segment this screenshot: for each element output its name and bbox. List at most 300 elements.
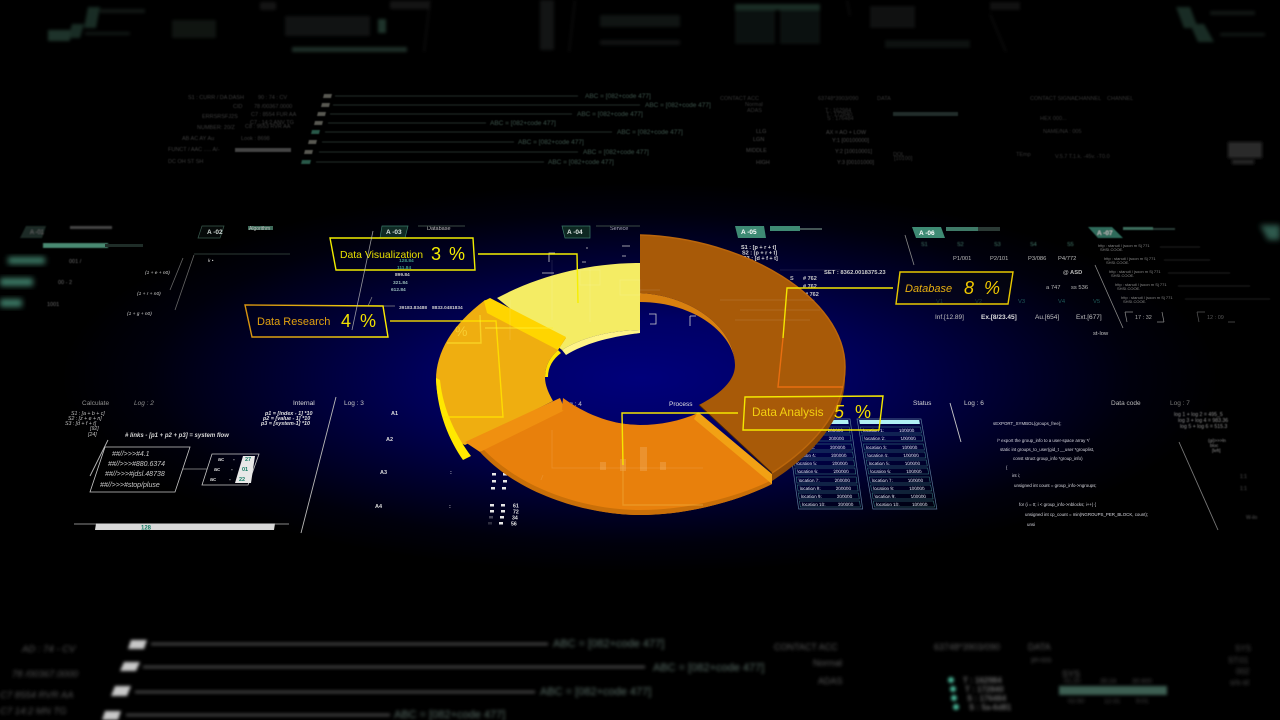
tab A-04: A -04	[567, 229, 583, 236]
highlighted SYS row: 35:24	[1100, 678, 1117, 685]
upper right center details: SET : 8362.0018375.23	[824, 270, 886, 276]
tab A-07	[1088, 227, 1175, 238]
tab A-03: A -03	[386, 229, 402, 236]
center mid-row numbers	[368, 258, 463, 311]
panel: code log 6: Data code	[1111, 400, 1141, 407]
callout: data visualization	[330, 238, 475, 270]
table left: location 7:	[798, 478, 820, 483]
link box	[90, 447, 190, 492]
table right: location 1:	[863, 428, 884, 433]
right database panel details: http : stanuti / jsoon m Sj 771	[1109, 269, 1161, 274]
panel: code log 6: /* export the group_info to a user-space array */	[997, 438, 1090, 443]
upper left labels: S1 : CURR / DA DASH	[188, 95, 244, 101]
data rows: upper ABC code lines: ABC = [082+code 477]	[577, 111, 643, 118]
highlighted SYS row: 01:20	[1064, 678, 1081, 685]
upper left labels: ERRSRSFJ2S	[202, 114, 238, 120]
upper right labels: LGN	[753, 137, 764, 143]
right database panel details: 12 : 09	[1207, 315, 1224, 321]
callout: data visualization: 3	[431, 244, 441, 264]
table left: location 3:	[794, 445, 815, 450]
callout: data analysis: %	[855, 402, 871, 422]
left blurred teal bars: (1 + e + n0)	[145, 270, 170, 276]
left blurred teal bars: 00 - 2	[58, 280, 72, 286]
panel: code log 6: (gi)>>>ln	[1208, 438, 1226, 443]
right database panel details: SHSI.COOE.	[1106, 260, 1129, 265]
callout: data research: %	[360, 311, 376, 331]
ac value box: ac	[218, 457, 224, 463]
bottom code lines	[102, 638, 764, 720]
upper right labels: HIGH	[756, 160, 770, 166]
upper right center details: # 762	[805, 292, 819, 298]
table left: 200000	[830, 445, 846, 450]
panel: log 3: Log : 3	[344, 400, 364, 407]
connector: database	[778, 288, 893, 387]
progress bar 128: 128	[141, 526, 152, 532]
bottom right labels: ADAS	[818, 676, 843, 686]
far right labels	[1228, 644, 1251, 687]
center mid-row numbers: 8833.0481834	[432, 305, 463, 311]
right database panel details: SHSI.COOE.	[1123, 299, 1146, 304]
right database panel details: SHSI.COOE.	[1100, 247, 1123, 252]
callout: data research: 4	[341, 311, 351, 331]
panel: code log 6: const struct group_info *group_info)	[1013, 456, 1083, 461]
upper left labels: Look : 8698	[241, 136, 270, 142]
data rows: upper ABC code lines: ABC = [082+code 477]	[585, 93, 651, 100]
bottom code lines: ABC = [082+code 477]	[553, 638, 664, 650]
table left: 200000	[828, 436, 845, 441]
panel: code log 6: log 5 + log 6 = 515.3	[1180, 424, 1227, 430]
upper right labels: DOL	[893, 152, 904, 158]
connector: data visualization	[478, 254, 578, 303]
tab A-02: Algorithm	[249, 226, 270, 232]
highlighted SYS row	[1059, 678, 1167, 705]
panel: log 3: Process	[669, 401, 693, 408]
callout: data visualization: %	[449, 244, 465, 264]
upper right labels: Normal	[745, 102, 763, 108]
right database panel details: V3	[1018, 299, 1025, 305]
link box: ##//>>>#stop/pluse	[100, 482, 160, 489]
panel: calculate log 2: Calculate	[82, 400, 109, 407]
right database panel details: Ext.[677]	[1076, 314, 1102, 321]
tab A-01: A -01	[30, 230, 45, 236]
data rows: upper ABC code lines: ABC = [082+code 477]	[518, 139, 584, 146]
upper right labels: LLG	[756, 129, 766, 135]
upper left labels: AB AC AY Au	[182, 136, 214, 142]
panel: code log 6: int i;	[1012, 473, 1020, 478]
teal status dots: S : 5a-6d81	[969, 703, 1012, 712]
ac value box: ac	[214, 467, 220, 473]
left blurred teal bars: (1 + r + n0)	[137, 291, 161, 297]
data rows: upper ABC code lines: ABC = [082+code 477]	[645, 102, 711, 109]
bottom right labels: CONTACT ACC	[774, 642, 838, 652]
table right: location 7:	[871, 478, 893, 483]
panel: code log 6: unsigned int count = group_info->ngroups;	[1014, 483, 1097, 488]
right database panel details: http : stanuti / jsoon m Sj 771	[1121, 295, 1173, 300]
tab A-03	[380, 226, 465, 238]
ac value box: 01	[242, 467, 248, 473]
right database panel details: @ ASD	[1063, 270, 1082, 276]
callout: database	[896, 272, 1013, 304]
table right: location 6:	[870, 469, 892, 474]
right database panel details: S2	[957, 242, 964, 248]
segment: data research amber	[436, 298, 566, 460]
ac value box	[202, 454, 259, 485]
right database panel details: http : stanuti / jsoon m Sj 771	[1115, 282, 1167, 287]
panel: code log 6	[950, 400, 1258, 530]
tab A-05	[735, 226, 822, 238]
left blurred teal bars: k •	[208, 258, 214, 264]
data rows: upper ABC code lines: ABC = [082+code 477]	[490, 120, 556, 127]
tables: location values	[786, 400, 937, 509]
tab A-07: A -07	[1097, 230, 1113, 237]
upper right labels: CONTACT SIGNAL	[1030, 96, 1078, 102]
upper right labels: 63748*3903/090	[818, 96, 858, 102]
panel: calculate log 2: S1 : [a + b + c]	[71, 411, 105, 417]
right database panel details: S3	[994, 242, 1001, 248]
upper right center details: S3 : [d + f + t]	[743, 256, 778, 262]
panel: code log 6: W-ilo	[1246, 515, 1258, 521]
upper right labels	[720, 96, 1133, 166]
far right keypad	[1228, 142, 1262, 164]
table left: location 5:	[796, 461, 818, 466]
right database panel details	[905, 225, 1280, 337]
table right: 100000	[903, 453, 920, 458]
left blurred teal bars: 1001	[47, 302, 59, 308]
left blurred teal bars: (1 + g + n0)	[127, 311, 152, 317]
bottom right labels	[774, 642, 1080, 686]
data rows: upper ABC code lines: ABC = [082+code 477]	[583, 149, 649, 156]
table right: 100000	[910, 494, 927, 499]
table right: 100000	[904, 461, 921, 466]
callout: data analysis: Data Analysis	[752, 405, 824, 419]
tab A-04: Service	[610, 226, 628, 232]
upper left labels: CID	[233, 104, 242, 110]
panel: code log 6: static int groups_to_user(gid_t __user *grouplist,	[1000, 447, 1094, 452]
upper right labels: HEX 000...	[1040, 116, 1067, 122]
connector lines	[390, 254, 893, 505]
bottom left labels: C7 8554 RVR AA	[0, 690, 73, 701]
table left: location 6:	[797, 469, 819, 474]
upper right center details: S	[790, 276, 794, 282]
panel: calculate log 2: S2 : [z + e + n]	[68, 416, 102, 422]
panel: code log 6: bloc	[1210, 443, 1219, 448]
data rows: upper ABC code lines: ABC = [082+code 477]	[617, 129, 683, 136]
table right: location 3:	[866, 445, 887, 450]
table left: location 9:	[801, 494, 822, 499]
panel: log 3: A4	[375, 504, 383, 510]
upper left labels: C7 : 8554 FUR AA	[251, 112, 297, 118]
right database panel details: P2/101	[990, 256, 1008, 262]
panel: code log 6: unsi	[1027, 522, 1035, 527]
right database panel details: P3/086	[1028, 256, 1046, 262]
right database panel details: S4	[1030, 242, 1037, 248]
center mid-row numbers: 111.84	[397, 265, 411, 271]
bottom code lines: ABC = [082+code 477]	[653, 662, 764, 674]
panel: calculate log 2: p3 = [system-1] *10	[260, 421, 310, 427]
table right: 100000	[902, 445, 918, 450]
table left: location 1:	[791, 428, 813, 433]
right database panel details: http : stanuti / jsoon m Sj 771	[1098, 243, 1150, 248]
data rows: upper ABC code lines	[301, 93, 711, 166]
left blurred teal bars	[0, 243, 290, 317]
table left: 200000	[835, 486, 852, 491]
right database panel details: SHSI.COOE.	[1117, 286, 1140, 291]
table left: location 8:	[799, 486, 821, 491]
bottom right labels: DATA	[1028, 642, 1051, 652]
right database panel details: st-low	[1093, 331, 1109, 337]
progress bar 128	[74, 524, 289, 532]
right database panel details: Au.[654]	[1035, 314, 1059, 321]
panel: log 3: A3	[380, 470, 387, 476]
panel: calculate log 2: [92]	[89, 426, 99, 432]
panel: code log 6: Log : 7	[1170, 400, 1190, 407]
panel: calculate log 2: p2 = [value - 1] *10	[262, 416, 310, 422]
upper right labels: ADAS	[747, 108, 762, 114]
center mid-row numbers: 321.84	[393, 280, 408, 286]
panel: calculate log 2: p1 = [index - 1] *10	[264, 411, 312, 417]
upper right labels: V.5.7 T.1.k. -45v. -T0.0	[1055, 154, 1110, 160]
bracket squares panel	[540, 246, 696, 326]
bottom left labels: C7 14:2 MN TG	[0, 706, 67, 717]
upper right labels: Y:3 [00101000]	[837, 160, 874, 166]
table left: 200000	[831, 453, 847, 458]
right database panel details: Ex.[8/23.45]	[981, 314, 1017, 321]
table left: 200000	[837, 494, 853, 499]
data rows: upper ABC code lines: ABC = [082+code 477]	[548, 159, 614, 166]
tab A-06	[912, 227, 1000, 238]
panel: code log 6: {	[1006, 465, 1008, 470]
bottom left labels: 78 /00367.0000	[12, 669, 79, 680]
upper right labels: NAME/NA : 005	[1043, 129, 1082, 135]
top blurred HUD strip	[48, 0, 1265, 52]
panel: code log 6: Log : 6	[964, 400, 984, 407]
right database panel details: SHSI.COOE.	[1111, 273, 1134, 278]
table right: location 9:	[874, 494, 896, 499]
bottom right labels: yn-ccs	[1031, 657, 1052, 664]
segment: database brown	[640, 235, 845, 481]
right database panel details: V5	[1093, 299, 1100, 305]
ac value box: ac	[210, 477, 216, 483]
right database panel details: http : stanuti / jsoon m Sj 771	[1104, 256, 1156, 261]
upper right labels: Y:2 [10010001]	[835, 149, 872, 155]
far right labels: s/s-st	[1230, 678, 1250, 687]
right database panel details: P4/772	[1058, 256, 1076, 262]
upper right labels: DATA	[877, 96, 891, 102]
table left: 200000	[832, 461, 848, 466]
donut chart	[436, 235, 845, 515]
panel: code log 6: [left]	[1212, 448, 1221, 453]
upper left labels: 78 /00367.0000	[254, 104, 292, 110]
dot list	[488, 473, 519, 528]
table right: 100000	[912, 502, 928, 507]
upper right labels: TEmp	[1016, 152, 1031, 158]
highlighted SYS row: 12:31	[1104, 698, 1121, 705]
upper right center details	[741, 245, 886, 298]
right database panel details: S5	[1067, 242, 1074, 248]
upper right center details: # 762	[803, 276, 817, 282]
upper right center details: S2 : [p + r + t]	[742, 250, 777, 256]
right database panel details: Inf.[12.89]	[935, 314, 964, 321]
center mid-row numbers: 612.84	[391, 287, 406, 293]
upper right labels: [10100]	[894, 156, 913, 162]
highlighted SYS row: 9:01	[1136, 698, 1149, 705]
table left: 200000	[833, 469, 849, 474]
dot list: 34	[512, 516, 518, 522]
bottom right labels: Normal	[813, 658, 842, 668]
tab A-05: A -05	[741, 229, 757, 236]
panel: calculate log 2: [24]	[87, 432, 97, 438]
table left: 200000	[827, 428, 844, 433]
connector: data analysis	[622, 413, 738, 505]
left blurred teal bars: 001 /	[69, 259, 82, 265]
table left: location 10:	[802, 502, 826, 507]
table right: 100000	[907, 478, 924, 483]
bottom row blurred HUD	[0, 638, 1251, 720]
table right: location 8:	[873, 486, 895, 491]
link box: ##//>>>#jdsl.48738	[105, 471, 165, 478]
right database panel details: 17 : 32	[1135, 315, 1152, 321]
connector: data research	[390, 315, 553, 417]
ac value box: 22	[239, 477, 245, 483]
tab A-06: A -06	[919, 230, 935, 237]
upper right labels: T : 162984	[825, 108, 851, 114]
callout: data analysis	[743, 396, 883, 430]
link box: ##//>>>#4.1	[112, 451, 150, 458]
table left: location 4:	[795, 453, 816, 458]
far right labels: SYS	[1235, 644, 1251, 653]
dot list: 61	[513, 504, 519, 510]
right database panel details: a 747	[1046, 285, 1061, 291]
upper right labels: CHANNEL	[1075, 96, 1101, 102]
far right labels: 002	[1236, 667, 1250, 676]
table right: 100000	[900, 436, 917, 441]
table left	[786, 419, 863, 509]
panel: calculate log 2: # links - [p1 + p2 + p3] = system flow	[125, 433, 229, 439]
panel: calculate log 2: S3 : [d + f + t]	[65, 421, 97, 427]
right database panel details: ss 536	[1071, 285, 1088, 291]
upper right labels: T : 172840	[826, 112, 852, 118]
panel: code log 6: log 1 + log 2 = 495_5	[1174, 412, 1223, 418]
tab A-02	[198, 226, 273, 238]
tabs row	[20, 226, 1175, 238]
far right labels: ST:01	[1228, 656, 1249, 665]
right database panel details: P1/001	[953, 256, 971, 262]
right database panel details: V1	[936, 299, 943, 305]
callout: database: Database	[905, 283, 952, 295]
bottom right labels: SYS	[1062, 669, 1080, 679]
panel: log 3: Log : 4	[562, 401, 582, 408]
panel: code log 6: 1:1	[1240, 486, 1247, 492]
callout: database: %	[984, 278, 1000, 298]
highlighted SYS row: 02:50	[1068, 698, 1085, 705]
upper right labels: S : 176484	[827, 116, 854, 122]
panel: calculate log 2: Log : 2	[134, 400, 154, 407]
upper left labels: FUNCT / AAC ..... A/-	[168, 147, 220, 153]
table right	[857, 419, 937, 509]
callout: data research	[245, 305, 388, 337]
callout: data research: Data Research	[257, 316, 330, 328]
upper left labels: C7 : 14:2 ANV TG	[250, 120, 294, 126]
dot list: 72	[513, 510, 519, 516]
table right: 100000	[909, 486, 925, 491]
table right: 100000	[906, 469, 922, 474]
upper left labels: DC OH ST SH	[168, 159, 203, 165]
panel: log 3	[344, 400, 693, 528]
upper right center details: # 762	[803, 284, 817, 290]
teal status dots: T : 172840	[965, 685, 1004, 694]
table right: 100000	[899, 428, 915, 433]
upper right center details: S1 : [p + r + t]	[741, 245, 776, 251]
dot list: 56	[511, 522, 517, 528]
teal status dots: T : 162984	[963, 676, 1002, 685]
right database panel details: S1	[921, 242, 928, 248]
tab A-04	[562, 226, 640, 238]
callout: database: 8	[964, 278, 974, 298]
bottom right labels: 63748*3903/090	[934, 642, 1000, 652]
table left: 200000	[838, 502, 854, 507]
right database panel details: V2	[975, 299, 982, 305]
ac value box: -	[229, 477, 231, 483]
panel: code log 6: sEXPORT_SYMBOL(groups_free);	[993, 421, 1062, 426]
upper right labels: Y:1 [00100000]	[832, 138, 869, 144]
bottom left labels: AD : 74 - CV	[21, 644, 77, 655]
upper right labels: AX = AO + LOW	[826, 130, 867, 136]
panel: log 3: A2	[386, 437, 393, 443]
ac value box: -	[231, 467, 233, 473]
callout: data analysis: 5	[834, 402, 845, 422]
ghost bars	[600, 447, 666, 471]
callout: data visualization: Data Visualization	[340, 250, 423, 261]
panel: calculate log 2: Internal	[293, 400, 315, 407]
ac value box: -	[233, 457, 235, 463]
segment: data visualization pale yellow	[497, 263, 640, 355]
tables: location values: Status	[913, 400, 932, 407]
tab A-03: Database	[427, 226, 451, 232]
table right: location 2:	[864, 436, 886, 441]
bottom code lines: ABC = [082+code 477]	[540, 686, 651, 698]
segment: data analysis orange	[465, 398, 772, 515]
center mid-row numbers: 128.84	[399, 258, 414, 264]
table left: location 2:	[792, 436, 814, 441]
tab A-01	[20, 226, 112, 238]
table right: location 5:	[868, 461, 890, 466]
link box: ##//>>>#880.6374	[108, 461, 165, 468]
panel: code log 6: log 3 + log 4 = 983.36	[1178, 418, 1228, 424]
upper left labels	[168, 95, 297, 165]
upper right labels: MIDDLE	[746, 148, 767, 154]
right database panel details: V4	[1058, 299, 1066, 305]
panel: code log 6: unsigned int cp_count = min(NGROUPS_PER_BLOCK, count);	[1025, 512, 1148, 517]
center mid-row numbers: 39183.83488	[399, 305, 427, 311]
upper right labels: CONTACT ACC	[720, 96, 759, 102]
ac value box: 27	[245, 457, 251, 463]
panel: log 3: :	[449, 504, 451, 510]
teal status dots	[948, 676, 1012, 712]
upper left labels: C8 : 9553 RVR AA	[245, 124, 291, 130]
panel: code log 6: 1:1	[1240, 474, 1247, 480]
table left: 200000	[834, 478, 851, 483]
upper left labels: 90 : 74 : CV	[258, 95, 287, 101]
ghost percentage: %	[455, 323, 467, 339]
upper left labels: NUMBER: 20/Z	[197, 125, 236, 131]
ghost grid through slices	[510, 260, 840, 480]
panel: code log 6: for (i = 0; i < group_info->nblocks; i++) {	[1019, 502, 1097, 507]
bottom left labels	[0, 644, 79, 717]
highlighted SYS row: 30:400	[1132, 678, 1152, 685]
table right: location 4:	[867, 453, 889, 458]
upper right labels: CHANNEL	[1107, 96, 1133, 102]
panel: log 3: :	[450, 470, 452, 476]
